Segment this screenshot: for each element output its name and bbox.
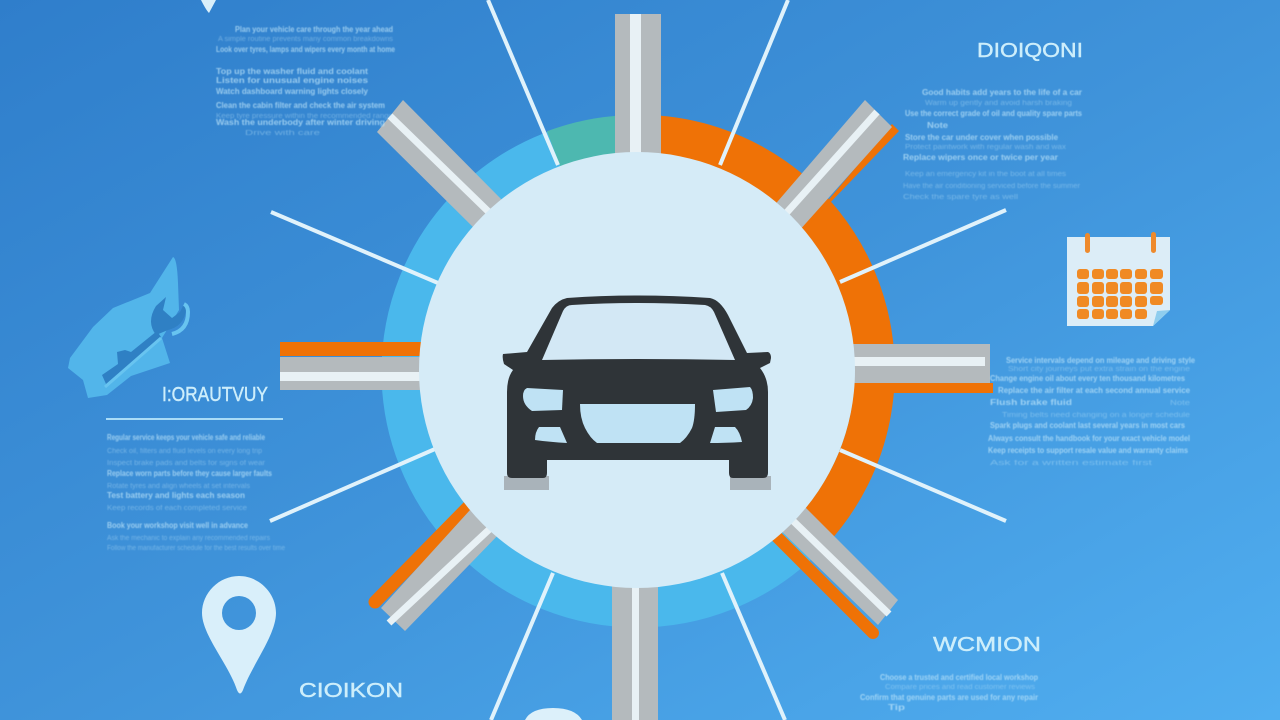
text block: right: Keep receipts to support resale value and warranty claims xyxy=(988,446,1188,455)
text block: top left xyxy=(216,25,395,137)
text block: top right: Store the car under cover when possible xyxy=(905,133,1059,142)
text block: top right: Check the spare tyre as well xyxy=(903,194,1019,201)
text block: top left: Plan your vehicle care through the year ahead xyxy=(235,25,393,34)
text block: right: Service intervals depend on mileage and driving style xyxy=(1006,356,1196,365)
icon: location pin top xyxy=(201,0,216,13)
text block: top left: Watch dashboard warning lights closely xyxy=(216,87,369,96)
text block: top right: Keep an emergency kit in the boot at all times xyxy=(905,171,1067,178)
text block: top right: Replace wipers once or twice per year xyxy=(903,153,1058,162)
icon: wrench on blue shape xyxy=(68,257,188,398)
text block: left: Rotate tyres and align wheels at set intervals xyxy=(107,483,251,490)
text block: bottom right: Confirm that genuine parts are used for any repair xyxy=(860,693,1038,702)
spoke: upper left xyxy=(377,100,505,231)
text block: top left: Wash the underbody after winter driving xyxy=(216,118,385,127)
text block: top right: Warm up gently and avoid harsh braking xyxy=(925,100,1072,107)
text block: top left: Look over tyres, lamps and wipers every month at home xyxy=(216,45,395,54)
spoke: bottom xyxy=(612,575,658,720)
divider: left xyxy=(106,418,283,420)
heading: bottom left: CIOIKON xyxy=(299,680,403,702)
text block: top left: Drive with care xyxy=(245,130,320,137)
text block: top right: Protect paintwork with regular wash and wax xyxy=(905,144,1067,151)
text block: left: Regular service keeps your vehicle safe and reliable xyxy=(107,433,265,442)
text block: right: Short city journeys put extra strain on the engine xyxy=(1008,366,1190,373)
text block: bottom right xyxy=(860,673,1038,712)
icon: location pin xyxy=(202,576,276,694)
spoke: right xyxy=(845,344,993,393)
spoke: left xyxy=(280,342,430,390)
text block: left: Book your workshop visit well in advance xyxy=(107,521,248,530)
text block: top right xyxy=(903,88,1083,201)
text block: top left: Clean the cabin filter and check the air system xyxy=(216,101,385,110)
spoke: lower left xyxy=(375,495,503,631)
text block: top right: Note xyxy=(927,121,949,130)
text block: bottom right: Tip xyxy=(888,703,905,712)
text block: top left: Listen for unusual engine noises xyxy=(216,76,369,85)
text block: right: Ask for a written estimate first xyxy=(990,460,1152,467)
spoke: lower right xyxy=(765,500,898,633)
central circle xyxy=(419,152,855,588)
text block: top left: Keep tyre pressure within the recommended range xyxy=(216,113,393,120)
text block: left: Test battery and lights each season xyxy=(107,491,245,500)
icon: car xyxy=(503,296,771,490)
text block: top left: A simple routine prevents many common breakdowns xyxy=(218,36,394,43)
text block: left: Keep records of each completed service xyxy=(107,505,247,512)
text block: left: Inspect brake pads and belts for signs of wear xyxy=(107,460,266,467)
text block: right: Replace the air filter at each second annual service xyxy=(998,386,1191,395)
text block: top right: Have the air conditioning serviced before the summer xyxy=(903,183,1081,190)
heading: bottom right: WCMION xyxy=(933,634,1041,656)
text block: left: Check oil, filters and fluid levels on every long trip xyxy=(107,448,262,455)
text block: right: Flush brake fluid xyxy=(990,398,1072,407)
donut ring xyxy=(402,135,875,608)
text block: top right: Use the correct grade of oil and quality spare parts xyxy=(905,109,1083,118)
text block: right: Always consult the handbook for your exact vehicle model xyxy=(988,434,1190,443)
text block: top left: Top up the washer fluid and coolant xyxy=(216,67,368,76)
spoke: upper right xyxy=(772,100,899,240)
text block: left: Ask the mechanic to explain any recommended repairs xyxy=(107,535,270,542)
text block: right: Note xyxy=(1170,400,1190,407)
heading: top right: DIOIQONI xyxy=(977,40,1083,62)
text block: bottom right: Choose a trusted and certified local workshop xyxy=(880,673,1038,682)
text block: left: Follow the manufacturer schedule for the best results over time xyxy=(107,545,285,552)
text block: left: Replace worn parts before they cause larger faults xyxy=(107,469,272,478)
heading: left: I:ORAUTVUY xyxy=(162,384,268,406)
connector lines xyxy=(270,0,1006,720)
text block: bottom right: Compare prices and read customer reviews xyxy=(885,684,1036,691)
spoke: top xyxy=(615,14,661,164)
text block: left xyxy=(107,433,285,552)
text block: right xyxy=(988,356,1196,467)
text block: right: Spark plugs and coolant last several years in most cars xyxy=(990,421,1186,430)
text block: top right: Good habits add years to the life of a car xyxy=(922,88,1082,97)
text block: right: Change engine oil about every ten thousand kilometres xyxy=(990,374,1185,383)
icon: bottom circle xyxy=(525,708,582,720)
text block: right: Timing belts need changing on a longer schedule xyxy=(1002,412,1190,419)
icon: calendar xyxy=(1067,232,1170,326)
